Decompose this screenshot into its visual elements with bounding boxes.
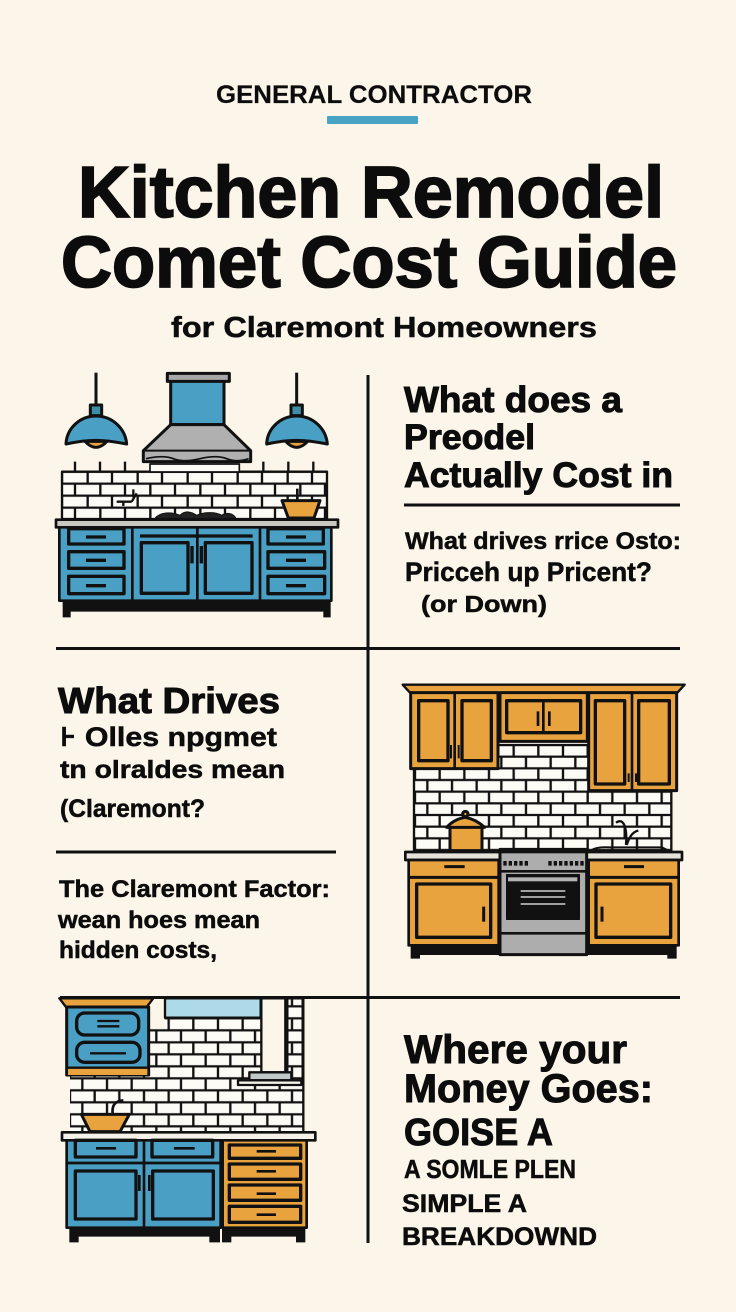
icon: range hood xyxy=(143,373,251,462)
text block: the claremont factor: hidden costs, xyxy=(59,937,217,964)
lower blue cabinets xyxy=(67,1140,221,1228)
text block: simple breakdown: SIMPLE A xyxy=(402,1190,527,1218)
window xyxy=(165,998,261,1018)
lower right cabinet xyxy=(589,860,679,945)
icon: orange bowl xyxy=(282,489,320,518)
text block: the claremont factor: The Claremont Factor: xyxy=(59,876,330,903)
text block: simple breakdown xyxy=(402,1154,597,1251)
illustration: blue kitchen island with hood and pendant lamps xyxy=(56,373,338,617)
countertop xyxy=(62,1132,315,1140)
icon: left pendant lamp xyxy=(66,373,127,447)
right drawers xyxy=(268,529,325,594)
title: Comet Cost Guide xyxy=(61,223,677,303)
orange drawer stack xyxy=(223,1140,307,1228)
backsplash bricks xyxy=(62,462,327,519)
icon: right pendant lamp xyxy=(267,373,327,447)
base xyxy=(411,945,677,959)
subheading: what drives price: (or Down) xyxy=(421,591,547,617)
title xyxy=(61,153,677,303)
backsplash bricks xyxy=(414,745,671,852)
upper blue cabinet xyxy=(59,998,153,1075)
heading: what drives xyxy=(58,680,285,823)
upper cabinets xyxy=(411,693,677,791)
subtitle: for Claremont Homeowners xyxy=(171,312,597,344)
subheading: what drives price: Pricceh up Pricent? xyxy=(405,557,652,587)
text block: simple breakdown: BREAKDOWND xyxy=(402,1223,597,1251)
cabinets xyxy=(59,527,331,601)
subheading: what drives price xyxy=(405,528,681,617)
countertop xyxy=(56,520,338,527)
icon: sink faucet xyxy=(592,821,667,850)
icon: oven range xyxy=(500,849,587,955)
heading: what does a remodel cost: What does a xyxy=(404,379,623,420)
eyebrow accent bar xyxy=(327,116,418,124)
text block: the claremont factor: wean hoes mean xyxy=(57,907,260,934)
heading: where your money goes: Where your xyxy=(404,1028,627,1072)
icon: faucet xyxy=(117,489,137,506)
subheading: what drives price: What drives rrice Osto: xyxy=(405,528,681,555)
cabinet base xyxy=(69,1228,305,1242)
cabinet base xyxy=(63,601,331,617)
orange bowl with faucet xyxy=(81,1100,129,1132)
heading: what drives: What Drives xyxy=(58,680,280,721)
heading: what drives: tn olraldes mean xyxy=(60,756,285,784)
heading: what does a remodel cost: Actually Cost in xyxy=(404,456,673,495)
text block: simple breakdown: A SOMLE PLEN xyxy=(404,1154,576,1184)
lower left cabinet xyxy=(409,860,499,945)
text block: the claremont factor xyxy=(57,876,330,964)
heading: what drives: (Claremont? xyxy=(60,795,205,823)
icon: cooktop burners xyxy=(155,512,236,518)
crown moulding xyxy=(403,685,685,693)
left drawers xyxy=(69,529,124,594)
hood chimney xyxy=(238,998,301,1085)
icon: cooking pot xyxy=(447,811,485,851)
heading: what does a remodel cost: Preodel xyxy=(404,418,535,457)
heading: what does a remodel cost xyxy=(404,379,673,495)
countertops xyxy=(405,852,682,860)
brick wall xyxy=(70,998,303,1132)
heading: what drives: ⊦ Olles npgmet xyxy=(60,722,277,752)
illustration: blue and orange kitchen with window xyxy=(59,998,315,1242)
center doors xyxy=(140,536,253,593)
heading: where your money goes: GOISE A xyxy=(404,1112,553,1154)
heading: where your money goes: Money Goes: xyxy=(404,1067,653,1111)
title: Kitchen Remodel xyxy=(78,153,664,233)
eyebrow: general contractor: GENERAL CONTRACTOR xyxy=(216,81,532,109)
illustration: orange kitchen with range xyxy=(403,685,685,959)
heading: where your money goes xyxy=(404,1028,653,1154)
